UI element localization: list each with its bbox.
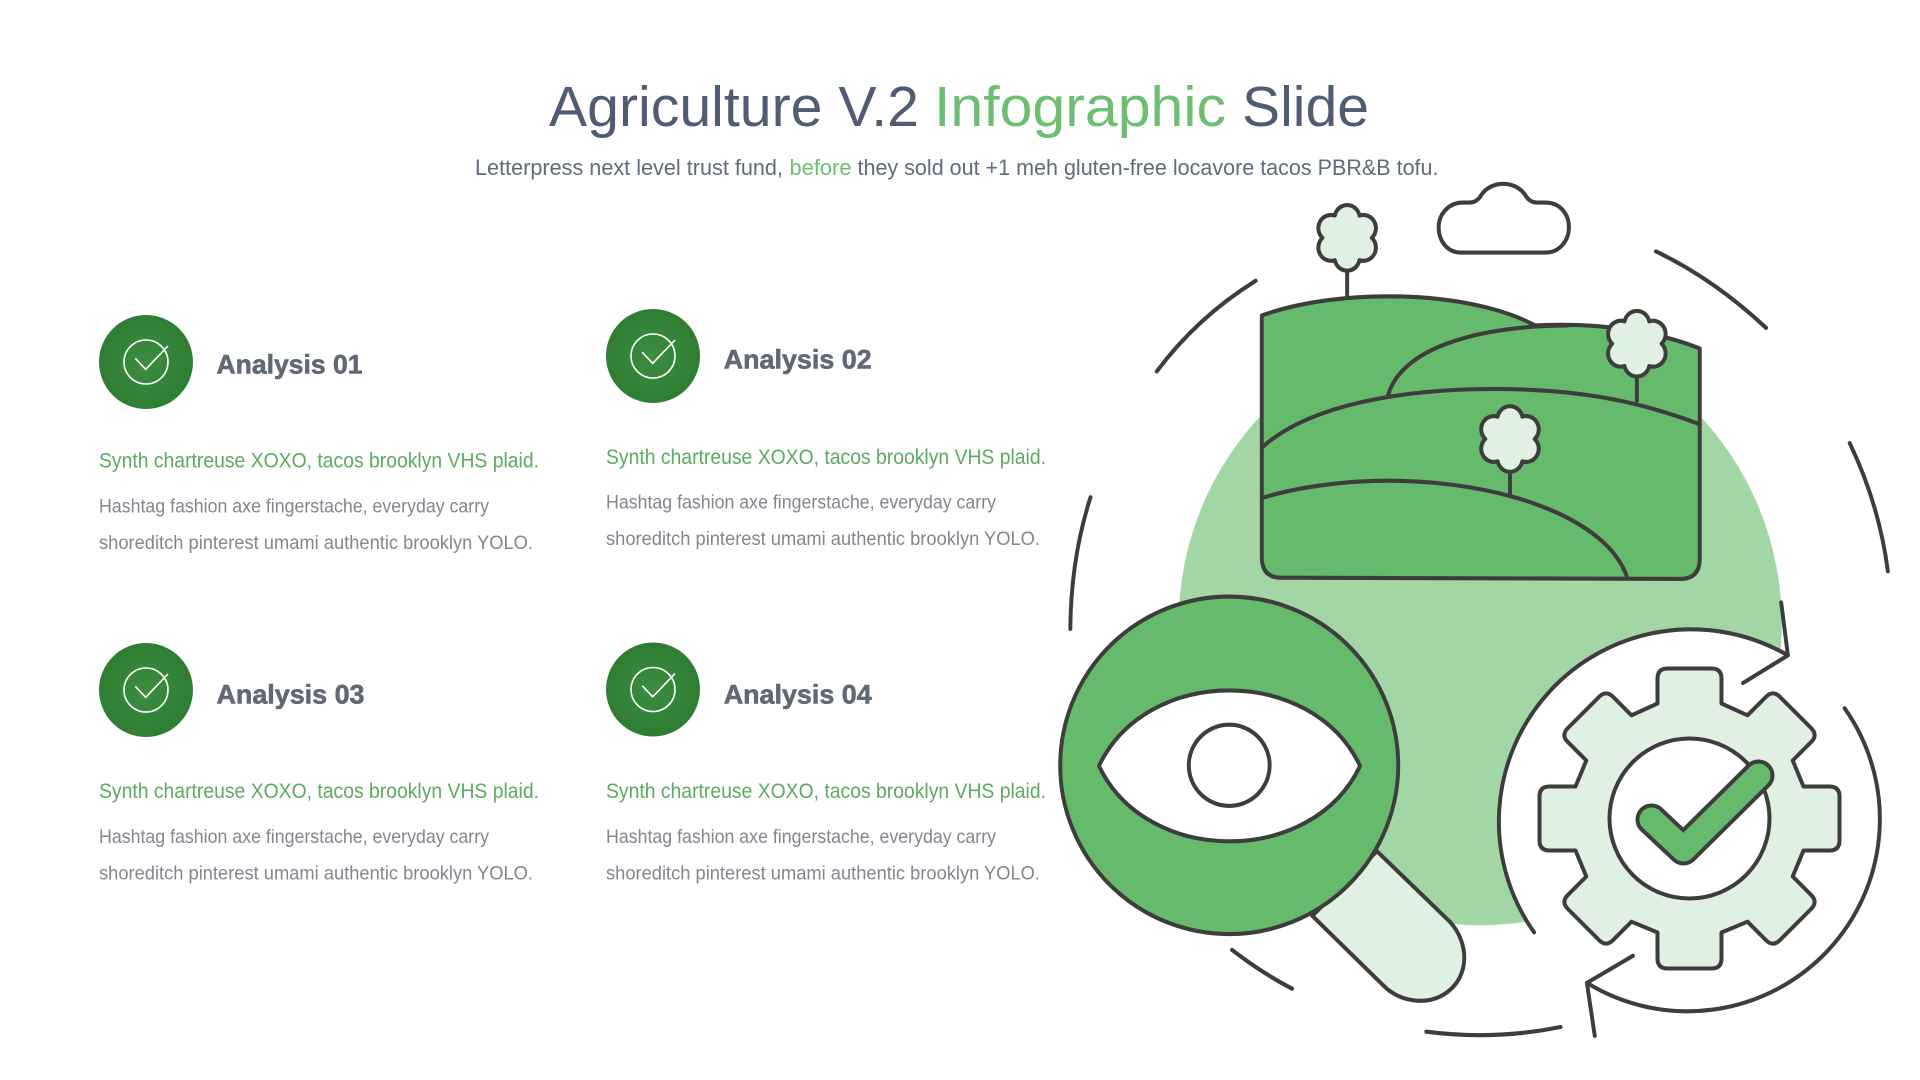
icon: analysis 03 check badge — [99, 643, 193, 737]
heading: analysis 03: Analysis 03 — [216, 680, 364, 710]
body text: analysis 03 — [99, 826, 533, 884]
trunks and trees — [1318, 205, 1666, 495]
magnifier handle — [1312, 851, 1464, 1001]
icon: gear with check — [1540, 668, 1840, 968]
body text: analysis 01: shoreditch pinterest umami authentic brooklyn YOLO. — [99, 532, 533, 554]
body text: analysis 01: Hashtag fashion axe fingerstache, everyday carry — [99, 496, 489, 518]
body text: analysis 04: Hashtag fashion axe fingerstache, everyday carry — [606, 826, 996, 848]
arrow: upper cycle arc — [1499, 602, 1788, 932]
icon: analysis 02 check badge — [606, 309, 700, 403]
panel: analysis 02 — [606, 309, 1046, 550]
subtitle — [475, 155, 1438, 180]
icon: analysis 01 check badge — [99, 315, 193, 409]
subtitle: before — [790, 155, 852, 180]
heading: analysis 04: Analysis 04 — [724, 680, 872, 710]
subheading: analysis 02: Synth chartreuse XOXO, tacos brooklyn VHS plaid. — [606, 445, 1046, 469]
arrow: lower cycle arc — [1587, 708, 1880, 1036]
body text: analysis 04 — [606, 826, 1040, 884]
subheading: analysis 03: Synth chartreuse XOXO, tacos brooklyn VHS plaid. — [99, 779, 539, 803]
background circle — [1179, 321, 1782, 925]
panel: analysis 03 — [99, 643, 539, 884]
subheading: analysis 04: Synth chartreuse XOXO, tacos brooklyn VHS plaid. — [606, 779, 1046, 803]
body text: analysis 02: shoreditch pinterest umami authentic brooklyn YOLO. — [606, 528, 1040, 550]
body text: analysis 02: Hashtag fashion axe fingerstache, everyday carry — [606, 492, 996, 514]
white disc behind gear — [1498, 629, 1880, 1012]
subtitle: Letterpress next level trust fund, — [475, 155, 783, 180]
panel: analysis 04 — [606, 642, 1046, 884]
land with hills — [1262, 296, 1700, 579]
body text: analysis 04: shoreditch pinterest umami authentic brooklyn YOLO. — [606, 862, 1040, 884]
body text: analysis 03: Hashtag fashion axe fingerstache, everyday carry — [99, 826, 489, 848]
title: Agriculture V.2 — [549, 75, 919, 139]
body text: analysis 03: shoreditch pinterest umami authentic brooklyn YOLO. — [99, 862, 533, 884]
illustration: agriculture analysis scene — [1060, 184, 1888, 1036]
magnifier lens — [1060, 597, 1398, 934]
icon: eye — [1099, 690, 1360, 841]
subtitle: they sold out +1 meh gluten-free locavore tacos PBR&B tofu. — [858, 155, 1438, 180]
panel: analysis 01 — [99, 315, 539, 554]
body text: analysis 01 — [99, 496, 533, 554]
cloud — [1439, 184, 1569, 253]
icon: analysis 04 check badge — [606, 642, 700, 736]
heading: analysis 01: Analysis 01 — [216, 350, 362, 380]
title: Slide — [1242, 75, 1369, 139]
dashed orbit arcs — [1070, 251, 1888, 1035]
subheading: analysis 01: Synth chartreuse XOXO, tacos brooklyn VHS plaid. — [99, 448, 539, 472]
title — [549, 75, 1369, 139]
title: Infographic — [934, 75, 1226, 139]
heading: analysis 02: Analysis 02 — [724, 344, 872, 374]
body text: analysis 02 — [606, 492, 1040, 550]
